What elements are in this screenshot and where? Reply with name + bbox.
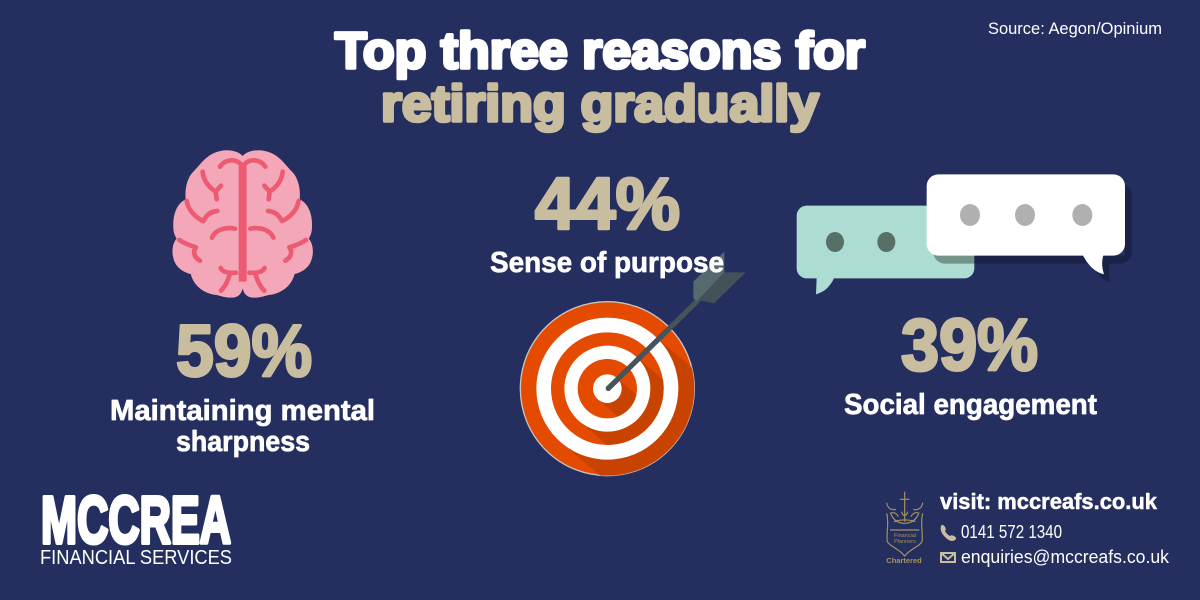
label: social engagement: Social engagement [844, 389, 1097, 421]
source note: Source: Aegon/Opinium [988, 19, 1162, 38]
crest: chartered financial planners: Financial [894, 533, 916, 539]
icon: phone [941, 525, 956, 541]
stat: 44 percent: 44% [535, 164, 680, 245]
contact: website: visit: mccreafs.co.uk [940, 489, 1158, 514]
logo: McCrea Financial Services: FINANCIAL SERVICES [40, 546, 232, 569]
crest: chartered financial planners [886, 492, 923, 565]
icon: speech bubbles [797, 174, 1132, 294]
contact: email: enquiries@mccreafs.co.uk [961, 547, 1170, 567]
white bubble shadow [974, 185, 1132, 282]
crest: chartered financial planners: Chartered [886, 556, 922, 565]
logo: McCrea Financial Services: MCCREA [41, 483, 231, 558]
stat: 39 percent: 39% [901, 305, 1038, 386]
label: maintaining mental sharpness [110, 395, 375, 458]
title line 1: Top three reasons for [335, 22, 865, 79]
contact: phone number: 0141 572 1340 [961, 522, 1062, 542]
arrow [608, 252, 746, 388]
green bubble [796, 206, 974, 294]
stat: 59 percent: 59% [176, 311, 312, 392]
icon: envelope [941, 553, 955, 562]
target rings [520, 301, 695, 476]
crest: chartered financial planners: Planners [894, 539, 916, 545]
icon: brain [172, 150, 313, 298]
label: maintaining mental sharpness: sharpness [176, 426, 310, 458]
white bubble [927, 174, 1125, 274]
title line 2: retiring gradually [381, 75, 820, 132]
logo: McCrea Financial Services [40, 483, 232, 569]
label: sense of purpose: Sense of purpose [490, 247, 724, 279]
label: maintaining mental sharpness: Maintaining mental [110, 395, 375, 427]
icon: target with arrow [520, 252, 746, 502]
title [335, 22, 865, 132]
